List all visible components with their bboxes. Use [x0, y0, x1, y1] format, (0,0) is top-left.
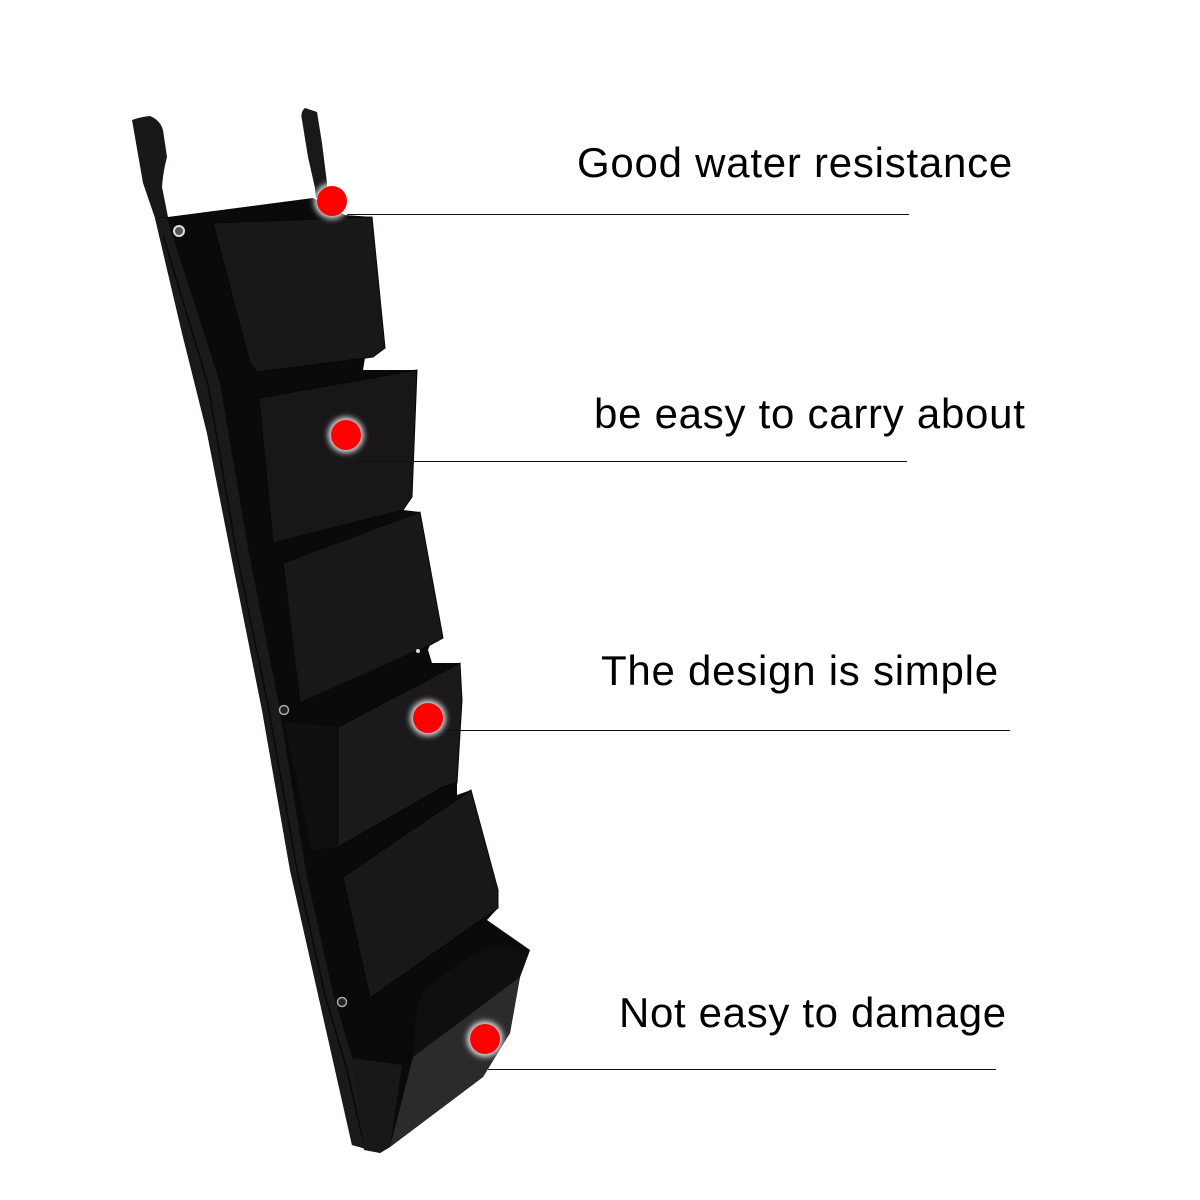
- stitched side strip: [155, 218, 375, 1150]
- eyelet middle: [280, 706, 288, 714]
- callout line 2: [357, 461, 907, 462]
- right strap: [301, 108, 327, 198]
- label: the design is simple: The design is simple: [601, 647, 999, 694]
- red dot 4: [470, 1024, 500, 1054]
- label: be easy to carry about: be easy to carry about: [594, 390, 1026, 437]
- pocket 4: [338, 663, 462, 847]
- pocket 4 side flap: [284, 722, 338, 850]
- red dot 2: [331, 420, 361, 450]
- pocket 3: [283, 512, 443, 703]
- callout line 4: [488, 1069, 996, 1070]
- red dot 3: [413, 703, 443, 733]
- pocket 2: [259, 370, 417, 543]
- label: not easy to damage: Not easy to damage: [619, 989, 1007, 1036]
- pocket 6 side flap: [350, 1020, 415, 1065]
- eyelet top: [174, 226, 184, 236]
- eyelet glint: [416, 649, 420, 653]
- eyelet bottom: [338, 998, 346, 1006]
- left strap: [132, 116, 168, 224]
- pocket 1: [213, 217, 385, 372]
- pocket 6 inner rim: [413, 947, 530, 1057]
- pocket 6 front panel: [390, 977, 520, 1147]
- label: good water resistance: Good water resistance: [577, 139, 1013, 186]
- callout line 1: [347, 214, 909, 215]
- pocket 6 lower side: [353, 1058, 402, 1153]
- callout line 3: [443, 730, 1010, 731]
- red dot 1: [317, 186, 347, 216]
- pocket 5: [343, 790, 498, 998]
- backing panel silhouette: [155, 198, 530, 1153]
